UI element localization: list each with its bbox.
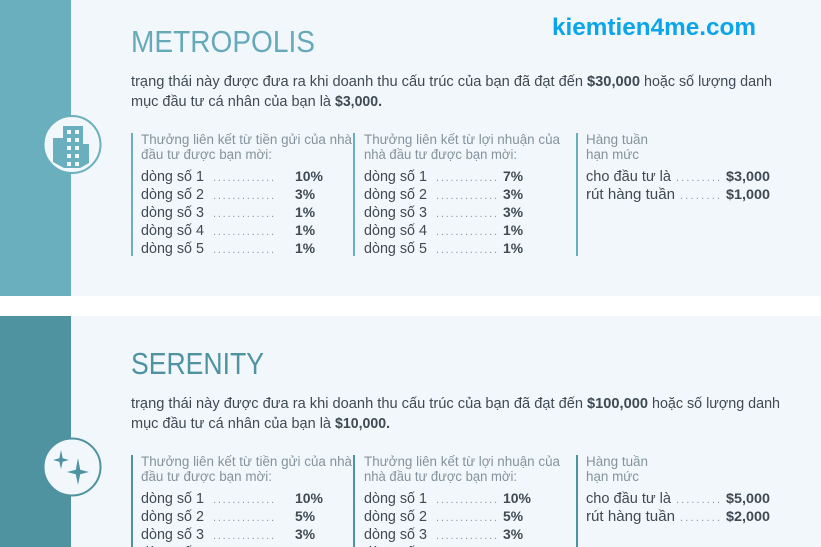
column: Metropolis profit bonus: dòng số 5 [364, 241, 427, 257]
column: Serenity profit bonus: ............. [436, 530, 497, 542]
column: Metropolis deposit bonus: dòng số 5 [141, 241, 204, 257]
column: Serenity weekly limits [576, 454, 770, 547]
column: Metropolis profit bonus: 3% [503, 204, 524, 220]
column: Metropolis deposit bonus: 10% [295, 168, 324, 184]
column: Serenity deposit bonus: ............. [213, 512, 274, 524]
column: Metropolis deposit bonus [131, 132, 352, 257]
column: Serenity weekly limits: $2,000 [726, 508, 770, 524]
column: Serenity deposit bonus: ............. [213, 494, 274, 506]
column: Metropolis weekly limits: cho đầu tư là [586, 169, 672, 185]
column: Metropolis deposit bonus: 1% [295, 240, 316, 256]
column: Metropolis weekly limits: hạn mức [586, 147, 639, 162]
column: Metropolis profit bonus: ............. [436, 190, 497, 202]
column: Metropolis weekly limits: ........ [680, 190, 720, 202]
column: Serenity profit bonus: ............. [436, 512, 497, 524]
text block: Metropolis intro: $30,000 [587, 74, 640, 90]
text block: Serenity intro: $10,000. [335, 416, 390, 432]
column: Metropolis weekly limits: rút hàng tuần [586, 187, 675, 203]
column: Serenity profit bonus: dòng số 3 [364, 527, 427, 543]
icon: building [44, 116, 100, 173]
column: Metropolis profit bonus: ............. [436, 208, 497, 220]
column: Metropolis profit bonus: dòng số 3 [364, 205, 427, 221]
text block: Metropolis intro: hoặc số lượng danh [644, 74, 772, 90]
panel: Serenity [0, 316, 821, 547]
column: Serenity profit bonus: nhà đầu tư được bạn mời: [364, 469, 517, 484]
text block: Metropolis intro: mục đầu tư cá nhân của bạn là [131, 94, 332, 110]
column: Serenity deposit bonus: 10% [295, 490, 324, 506]
column: Serenity weekly limits: hạn mức [586, 469, 639, 484]
column: Metropolis weekly limits [576, 132, 770, 256]
text block: Serenity intro: mục đầu tư cá nhân của bạn là [131, 416, 332, 432]
title: Metropolis: METROPOLIS [131, 25, 315, 59]
column: Metropolis weekly limits: ......... [676, 172, 720, 184]
column: Serenity profit bonus: 10% [503, 490, 532, 506]
column: Serenity weekly limits: ........ [680, 512, 720, 524]
column: Metropolis deposit bonus: 3% [295, 186, 316, 202]
column: Metropolis profit bonus: nhà đầu tư được bạn mời: [364, 147, 517, 162]
column: Metropolis profit bonus: 7% [503, 168, 524, 184]
text block: Metropolis intro: trạng thái này được đưa ra khi doanh thu cấu trúc của bạn đã đạt đến [131, 74, 583, 90]
column: Serenity deposit bonus [131, 454, 352, 547]
column: Metropolis profit bonus: dòng số 2 [364, 187, 427, 203]
column: Serenity weekly limits: Hàng tuần [586, 454, 648, 469]
column: Metropolis profit bonus: 1% [503, 240, 524, 256]
title: Serenity: SERENITY [131, 347, 264, 381]
column: Serenity profit bonus: 3% [503, 526, 524, 542]
text block: Serenity intro: trạng thái này được đưa ra khi doanh thu cấu trúc của bạn đã đạt đến [131, 396, 583, 412]
column: Metropolis deposit bonus: dòng số 3 [141, 205, 204, 221]
column: Metropolis deposit bonus: dòng số 4 [141, 223, 204, 239]
column: Metropolis profit bonus: dòng số 4 [364, 223, 427, 239]
column: Serenity profit bonus: 5% [503, 508, 524, 524]
column: Serenity profit bonus: dòng số 2 [364, 509, 427, 525]
column: Serenity deposit bonus: 3% [295, 526, 316, 542]
column: Metropolis weekly limits: $3,000 [726, 168, 770, 184]
column: Metropolis deposit bonus: ............. [213, 226, 274, 238]
column: Serenity weekly limits: rút hàng tuần [586, 509, 675, 525]
column: Serenity deposit bonus: dòng số 3 [141, 527, 204, 543]
column: Metropolis profit bonus: dòng số 1 [364, 169, 427, 185]
column: Serenity deposit bonus: đầu tư được bạn mời: [141, 469, 272, 484]
column: Metropolis deposit bonus: ............. [213, 190, 274, 202]
sidebar: Metropolis [0, 0, 71, 296]
column: Metropolis deposit bonus: ............. [213, 208, 274, 220]
column: Serenity deposit bonus: 5% [295, 508, 316, 524]
column: Metropolis deposit bonus: dòng số 1 [141, 169, 204, 185]
column: Metropolis deposit bonus: Thưởng liên kết từ tiền gửi của nhà [141, 132, 352, 147]
text block: Serenity intro: $100,000 [587, 396, 648, 412]
column: Serenity deposit bonus: dòng số 1 [141, 491, 204, 507]
text block: Metropolis intro: $3,000. [335, 94, 382, 110]
column: Metropolis weekly limits: $1,000 [726, 186, 770, 202]
column: Serenity weekly limits: ......... [676, 494, 720, 506]
column: Metropolis profit bonus: ............. [436, 226, 497, 238]
column: Serenity profit bonus: dòng số 1 [364, 491, 427, 507]
icon: sparkles [44, 438, 100, 496]
column: Metropolis profit bonus: 1% [503, 222, 524, 238]
column: Metropolis deposit bonus: đầu tư được bạn mời: [141, 147, 272, 162]
column: Metropolis weekly limits: Hàng tuần [586, 132, 648, 147]
text block: Metropolis intro [131, 74, 772, 110]
sidebar: Serenity [0, 316, 71, 547]
column: Metropolis profit bonus [353, 132, 560, 257]
text block: Serenity intro [131, 396, 780, 432]
column: Metropolis deposit bonus: 1% [295, 204, 316, 220]
column: Serenity deposit bonus: Thưởng liên kết từ tiền gửi của nhà [141, 454, 352, 469]
column: Metropolis deposit bonus: ............. [213, 244, 274, 256]
column: Metropolis profit bonus: Thưởng liên kết từ lợi nhuận của [364, 132, 560, 147]
text block: Serenity intro: hoặc số lượng danh [652, 396, 780, 412]
column: Serenity profit bonus: ............. [436, 494, 497, 506]
column: Serenity weekly limits: $5,000 [726, 490, 770, 506]
column: Metropolis deposit bonus: dòng số 2 [141, 187, 204, 203]
column: Serenity profit bonus: Thưởng liên kết từ lợi nhuận của [364, 454, 560, 469]
column: Metropolis profit bonus: ............. [436, 172, 497, 184]
column: Serenity deposit bonus: dòng số 2 [141, 509, 204, 525]
column: Metropolis deposit bonus: 1% [295, 222, 316, 238]
column: Serenity deposit bonus: ............. [213, 530, 274, 542]
column: Metropolis profit bonus: 3% [503, 186, 524, 202]
panel: Metropolis [0, 0, 821, 296]
watermark: kiemtien4me.com [552, 14, 756, 41]
column: Metropolis deposit bonus: ............. [213, 172, 274, 184]
column: Serenity weekly limits: cho đầu tư là [586, 491, 672, 507]
column: Serenity profit bonus [353, 454, 560, 547]
column: Metropolis profit bonus: ............. [436, 244, 497, 256]
